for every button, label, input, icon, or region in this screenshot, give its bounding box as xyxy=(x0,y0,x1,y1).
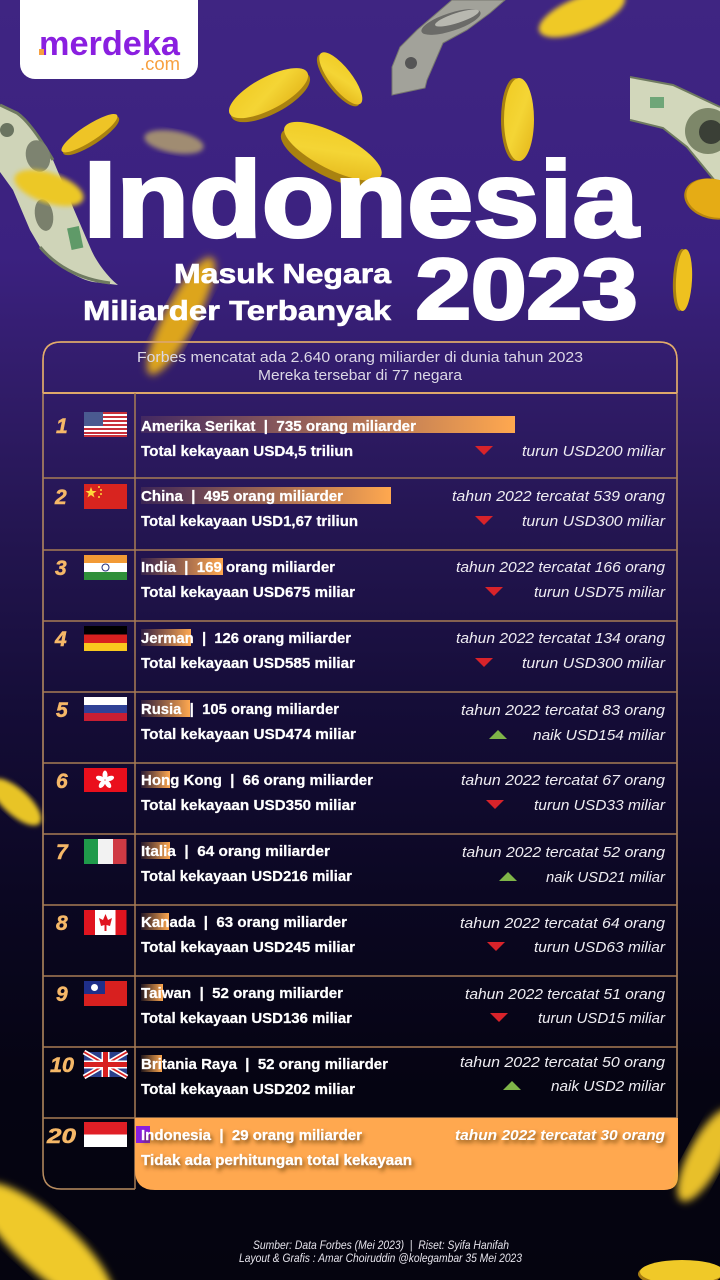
table frame xyxy=(43,342,677,1189)
foreground blurred coins xyxy=(0,771,720,1280)
row 10: Britania Raya: Total kekayaan USD202 miliar xyxy=(141,1081,355,1098)
row 1: Amerika Serikat: Total kekayaan USD4,5 triliun xyxy=(141,443,353,460)
row 2: China: tahun 2022 tercatat 539 orang xyxy=(452,488,666,505)
row 5: Rusia: Rusia | 105 orang miliarder xyxy=(141,701,339,718)
flag: Indonesia xyxy=(84,1122,127,1147)
row 2: China xyxy=(54,484,666,530)
row 1: Amerika Serikat xyxy=(56,412,666,460)
subtitle xyxy=(83,258,391,326)
row 3: India: Total kekayaan USD675 miliar xyxy=(141,584,355,601)
flag: Germany xyxy=(84,626,127,651)
row 9: Taiwan: turun USD15 miliar xyxy=(538,1010,666,1027)
row 2: China: China | 495 orang miliarder xyxy=(141,488,343,505)
row 9: Taiwan: tahun 2022 tercatat 51 orang xyxy=(465,986,666,1003)
flag: Canada xyxy=(84,910,126,935)
footer credits: Layout & Grafis : Amar Choiruddin @kolegambar 35 Mei 2023 xyxy=(239,1251,522,1265)
row 3: India: India | 169 orang miliarder xyxy=(141,559,335,576)
row 4: Jerman: turun USD300 miliar xyxy=(522,655,666,672)
row 1: Amerika Serikat: 1 xyxy=(56,415,68,438)
illustration: dollar bill top xyxy=(392,0,505,95)
row 2: China: Total kekayaan USD1,67 triliun xyxy=(141,513,358,530)
row 4: Jerman: Jerman | 126 orang miliarder xyxy=(141,630,351,647)
row 20: Indonesia highlight: tahun 2022 tercatat 30 orang xyxy=(455,1127,665,1144)
subtitle: Miliarder Terbanyak xyxy=(83,295,391,326)
logo: merdeka.com: merdeka xyxy=(39,25,181,63)
flag: Russia xyxy=(84,697,127,721)
row 10: Britania Raya: Britania Raya | 52 orang miliarder xyxy=(141,1056,388,1073)
row 6: Hong Kong: tahun 2022 tercatat 67 orang xyxy=(461,772,666,789)
row 20: Indonesia highlight: 20 xyxy=(46,1125,76,1148)
row 7: Italia: 7 xyxy=(56,841,69,864)
title: 2023: 2023 xyxy=(416,242,638,338)
row 7: Italia: tahun 2022 tercatat 52 orang xyxy=(462,844,666,861)
row 1: Amerika Serikat: Amerika Serikat | 735 orang miliarder xyxy=(141,418,416,435)
row 6: Hong Kong: turun USD33 miliar xyxy=(534,797,666,814)
row 8: Kanada xyxy=(56,910,666,956)
illustration: dollar bill right xyxy=(630,77,720,187)
row 3: India: turun USD75 miliar xyxy=(534,584,666,601)
table intro text xyxy=(137,350,583,384)
illustration: gold coins behind title xyxy=(57,0,720,382)
logo: merdeka.com: .com xyxy=(140,54,180,74)
row 7: Italia: Italia | 64 orang miliarder xyxy=(141,843,330,860)
row 9: Taiwan: Total kekayaan USD136 miliar xyxy=(141,1010,352,1027)
row 4: Jerman: Total kekayaan USD585 miliar xyxy=(141,655,355,672)
flag: UK xyxy=(84,1052,127,1077)
row 4: Jerman: tahun 2022 tercatat 134 orang xyxy=(456,630,666,647)
row 2: China: 2 xyxy=(54,486,67,509)
subtitle: Masuk Negara xyxy=(174,258,391,289)
row 20: Indonesia highlight: Tidak ada perhitungan total kekayaan xyxy=(141,1152,412,1169)
footer credits xyxy=(239,1238,522,1265)
row 9: Taiwan xyxy=(56,981,666,1027)
row 1: Amerika Serikat: turun USD200 miliar xyxy=(522,443,666,460)
row 10: Britania Raya: tahun 2022 tercatat 50 orang xyxy=(460,1054,666,1071)
row 8: Kanada: turun USD63 miliar xyxy=(534,939,666,956)
flag: China xyxy=(84,484,127,509)
flag: Taiwan xyxy=(84,981,127,1006)
logo: merdeka.com xyxy=(20,0,198,79)
illustration: dollar bill left xyxy=(0,105,118,285)
row 10: Britania Raya xyxy=(50,1052,666,1098)
row 3: India xyxy=(55,555,666,601)
title: Indonesia: Indonesia xyxy=(84,138,640,260)
row 3: India: 3 xyxy=(55,557,67,580)
row 6: Hong Kong: 6 xyxy=(56,770,68,793)
row 5: Rusia: 5 xyxy=(56,699,68,722)
row 7: Italia: naik USD21 miliar xyxy=(546,869,666,886)
row 8: Kanada: 8 xyxy=(56,912,68,935)
row 8: Kanada: tahun 2022 tercatat 64 orang xyxy=(460,915,666,932)
row 9: Taiwan: Taiwan | 52 orang miliarder xyxy=(141,985,343,1002)
row 6: Hong Kong: Hong Kong | 66 orang miliarder xyxy=(141,772,373,789)
flag: India xyxy=(84,555,127,580)
row 5: Rusia: tahun 2022 tercatat 83 orang xyxy=(461,702,666,719)
row 5: Rusia: naik USD154 miliar xyxy=(533,727,666,744)
blurred coin left foreground xyxy=(10,163,88,213)
footer credits: Sumber: Data Forbes (Mei 2023) | Riset: Syifa Hanifah xyxy=(253,1238,509,1252)
row 6: Hong Kong xyxy=(56,768,666,814)
row 20: Indonesia highlight: Indonesia | 29 orang miliarder xyxy=(141,1127,362,1144)
row 9: Taiwan: 9 xyxy=(56,983,68,1006)
row 6: Hong Kong: Total kekayaan USD350 miliar xyxy=(141,797,356,814)
row 20: Indonesia highlight xyxy=(46,1118,678,1190)
row 8: Kanada: Kanada | 63 orang miliarder xyxy=(141,914,347,931)
row 7: Italia: Total kekayaan USD216 miliar xyxy=(141,868,352,885)
row 5: Rusia xyxy=(56,697,666,744)
row 4: Jerman xyxy=(54,626,666,672)
row 4: Jerman: 4 xyxy=(54,628,67,651)
row 2: China: turun USD300 miliar xyxy=(522,513,666,530)
flag: Hong Kong xyxy=(84,768,127,792)
flag: Italy xyxy=(84,839,126,864)
row 5: Rusia: Total kekayaan USD474 miliar xyxy=(141,726,356,743)
table intro text: Forbes mencatat ada 2.640 orang miliarder di dunia tahun 2023 xyxy=(137,350,583,366)
table intro text: Mereka tersebar di 77 negara xyxy=(258,368,463,384)
row 3: India: tahun 2022 tercatat 166 orang xyxy=(456,559,666,576)
row 10: Britania Raya: naik USD2 miliar xyxy=(551,1078,666,1095)
row 7: Italia xyxy=(56,839,666,886)
flag: USA xyxy=(84,412,127,437)
row 10: Britania Raya: 10 xyxy=(50,1054,74,1077)
row 8: Kanada: Total kekayaan USD245 miliar xyxy=(141,939,355,956)
